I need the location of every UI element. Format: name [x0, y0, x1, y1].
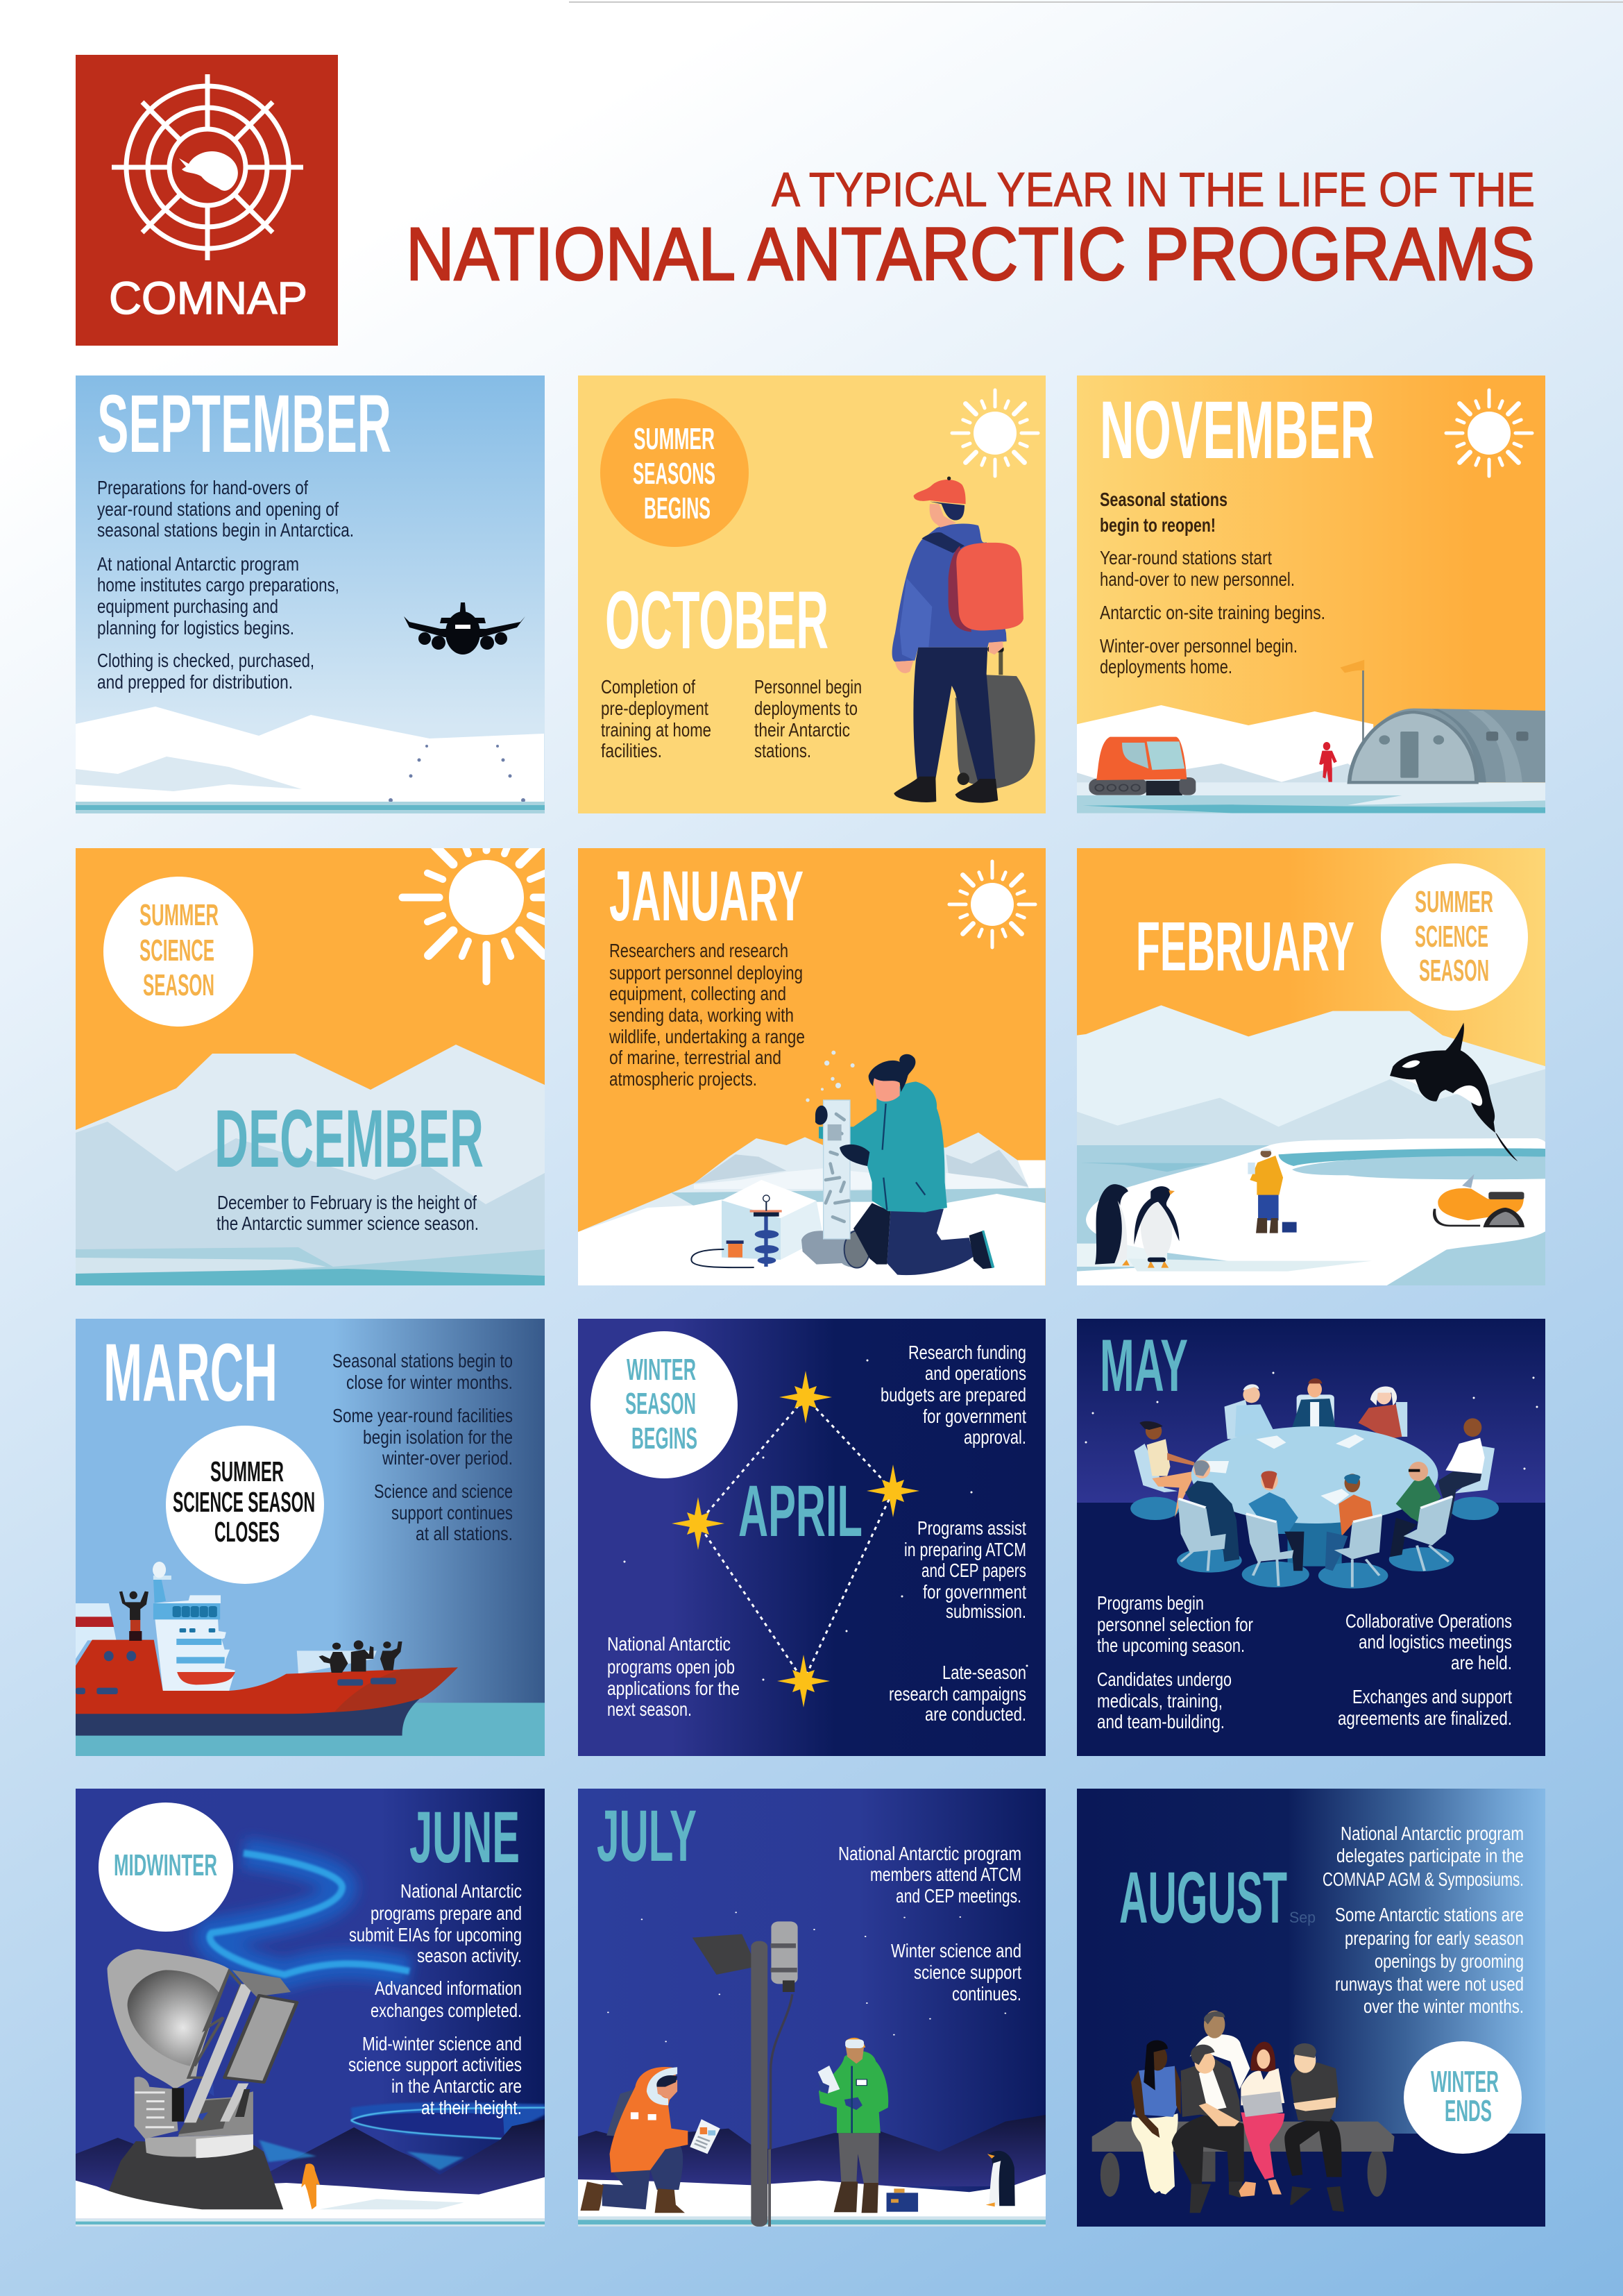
icon: instrument mast: [692, 1921, 798, 2227]
seated man with jacket: [1172, 2045, 1244, 2213]
text: April notes left: National Antarctic: [607, 1633, 731, 1655]
panel: November: [1077, 375, 1549, 822]
text: October notes right: their Antarctic: [754, 719, 850, 741]
text: November notes: [1100, 489, 1325, 677]
text: November notes: Year-round stations start: [1100, 547, 1272, 568]
text: April notes right: approval.: [964, 1426, 1026, 1448]
text: March notes: [332, 1350, 513, 1544]
text: April notes right: Programs assist: [917, 1517, 1026, 1539]
text: June notes: science support activities: [348, 2054, 522, 2075]
text: January notes: atmospheric projects.: [609, 1068, 757, 1090]
icon: sun: [1446, 390, 1532, 476]
text: June notes: Advanced information: [375, 1977, 522, 1999]
text: July notes: [838, 1843, 1021, 2004]
badge: summer science season: SUMMER: [1415, 885, 1493, 919]
badge: summer science season closes: SCIENCE SEASON: [173, 1486, 315, 1518]
icon: sun: [949, 861, 1035, 947]
text: April notes right: for government: [923, 1406, 1026, 1427]
standing man: [1190, 2011, 1250, 2089]
text: April notes right: budgets are prepared: [881, 1384, 1026, 1406]
text: November notes: Antarctic on-site training begins.: [1100, 602, 1325, 623]
text: June notes: exchanges completed.: [371, 2000, 522, 2021]
person kneeling: [819, 1054, 994, 1275]
text: May notes left: and team-building.: [1097, 1711, 1225, 1732]
badge: winter season begins: WINTER: [627, 1353, 696, 1387]
panel: July: [578, 1789, 1048, 2227]
ice floe: [1086, 1138, 1547, 1265]
text: January notes: sending data, working with: [609, 1004, 794, 1026]
badge: midwinter: [99, 1803, 233, 1932]
text: September notes: equipment purchasing and: [97, 596, 278, 617]
icon: arched hut: [1349, 709, 1549, 782]
icon: bench: [1092, 2122, 1395, 2197]
heading: October: OCTOBER: [605, 575, 829, 666]
text: September notes: At national Antarctic program: [97, 553, 299, 575]
people and chairs in front: [1177, 1460, 1454, 1589]
icon: sun: [952, 390, 1038, 476]
text: April notes right: for government: [923, 1581, 1026, 1603]
constellation diamond lines: [698, 1397, 893, 1681]
icon: orange tracked vehicle: [1089, 737, 1196, 795]
icon: ice core tube: [824, 1100, 850, 1239]
person kneeling in orange parka: [580, 2067, 720, 2213]
text: April notes right: Late-season: [942, 1662, 1026, 1683]
illustration: ice floe, penguins, orca, snowmobile: [1077, 1005, 1547, 1289]
heading: September: SEPTEMBER: [97, 378, 391, 470]
text: October notes left: training at home: [601, 719, 711, 741]
text: April notes right: Research funding: [908, 1342, 1026, 1363]
text: April notes left: [607, 1633, 740, 1720]
heading: November: NOVEMBER: [1100, 385, 1375, 476]
text: June notes: [348, 1880, 522, 2118]
icon: person in orange: [301, 2163, 320, 2209]
title: [406, 162, 1535, 296]
heading: January: JANUARY: [609, 856, 804, 936]
text: October notes right: [754, 676, 862, 761]
text: April notes right: are conducted.: [925, 1703, 1026, 1725]
text: May notes left: the upcoming season.: [1097, 1635, 1245, 1656]
illustration: traveller with backpack and suitcase: [892, 476, 1035, 803]
icon: crew silhouettes: [119, 1592, 402, 1673]
text: December notes: the Antarctic summer science season.: [216, 1213, 479, 1234]
text: January notes: wildlife, undertaking a range: [609, 1026, 805, 1047]
text: March notes: close for winter months.: [346, 1371, 513, 1393]
badge: summer science season: SEASON: [143, 968, 214, 1002]
text: September notes: year-round stations and opening of: [97, 498, 339, 520]
text: June notes: in the Antarctic are: [391, 2075, 522, 2097]
text: April notes right: and CEP papers: [921, 1560, 1026, 1581]
text: November notes: hand-over to new personnel.: [1100, 568, 1295, 590]
icon: gloves: [815, 1106, 869, 1166]
badge: summer science season: SCIENCE: [139, 934, 214, 968]
text: November notes: begin to reopen!: [1100, 514, 1216, 536]
heading: February: FEBRUARY: [1136, 908, 1354, 986]
text: May notes left: personnel selection for: [1097, 1614, 1253, 1635]
text: March notes: support continues: [391, 1502, 513, 1523]
text: May notes left: medicals, training,: [1097, 1690, 1223, 1712]
icon: constellation stars: [672, 1371, 919, 1707]
badge: summer science season closes: SUMMER: [210, 1455, 284, 1487]
text: June notes: Mid-winter science and: [362, 2033, 522, 2054]
logo wordmark: COMNAP: [109, 272, 307, 323]
text: December notes: [216, 1192, 479, 1234]
icon: ice auger and motor: [691, 1195, 782, 1267]
text: August notes: preparing for early season: [1345, 1927, 1524, 1949]
text: January notes: support personnel deploying: [609, 962, 803, 984]
text: October notes right: Personnel begin: [754, 676, 862, 698]
text: October notes left: Completion of: [601, 676, 695, 698]
panel: March: [76, 1319, 545, 1756]
text: June notes: at their height.: [421, 2097, 522, 2118]
badge: summer seasons begins: SEASONS: [633, 457, 715, 491]
text: September notes: Clothing is checked, purchased,: [97, 650, 314, 671]
panel: February: [1077, 848, 1547, 1289]
badge: summer science season: [1381, 863, 1528, 1011]
text: July notes: National Antarctic program: [838, 1843, 1021, 1864]
icon: equipment box: [887, 2188, 918, 2212]
text: August notes: [1323, 1823, 1524, 2017]
icon: aeroplane: [404, 602, 525, 655]
badge: summer science season: SEASON: [1419, 954, 1489, 988]
text: April notes right: [881, 1342, 1026, 1725]
text: August notes: Some Antarctic stations are: [1335, 1904, 1524, 1925]
text: March notes: Science and science: [374, 1480, 513, 1502]
heading: June: JUNE: [409, 1797, 520, 1878]
text: January notes: of marine, terrestrial and: [609, 1047, 781, 1068]
text: December notes: December to February is the height of: [217, 1192, 477, 1213]
heading: March: MARCH: [103, 1327, 278, 1419]
seated woman in blue: [1131, 2041, 1181, 2195]
text: March notes: Seasonal stations begin to: [332, 1350, 513, 1371]
icon: rock core: [801, 1230, 869, 1268]
text: August notes: delegates participate in the: [1336, 1845, 1524, 1866]
badge: summer seasons begins: [600, 398, 749, 547]
aurora: [210, 1853, 409, 1975]
heading: July: JULY: [597, 1796, 697, 1877]
badge: summer seasons begins: SUMMER: [634, 422, 715, 456]
mountains and water: [76, 1045, 545, 1285]
text: April notes right: in preparing ATCM: [904, 1539, 1026, 1560]
illustration: researcher with ice core: [578, 1051, 1046, 1285]
text: April notes left: next season.: [607, 1698, 692, 1720]
text: September notes: planning for logistics begins.: [97, 617, 294, 639]
text: June notes: programs prepare and: [371, 1902, 522, 1924]
text: July notes: and CEP meetings.: [896, 1885, 1021, 1907]
text: April notes right: and operations: [925, 1362, 1026, 1384]
faint stray label: Sep: [1289, 1909, 1316, 1926]
text: October notes left: facilities.: [601, 740, 662, 761]
icon: flag: [1340, 660, 1364, 782]
panel: January: [578, 848, 1046, 1285]
panel: April: [578, 1319, 1046, 1756]
snowy mountains and runway: [76, 707, 545, 813]
illustration: station scene with vehicle, person and hut: [1077, 660, 1549, 822]
text: April notes right: submission.: [946, 1601, 1026, 1622]
panel: September: [76, 375, 545, 813]
text: July notes: members attend ATCM: [870, 1864, 1021, 1885]
text: October notes left: pre-deployment: [601, 698, 708, 719]
seated woman with laptop: [1239, 2042, 1284, 2197]
seated man in black: [1284, 2043, 1344, 2212]
table: [1191, 1426, 1438, 1567]
icon: polar web with Antarctica: [112, 74, 303, 260]
text: April notes left: applications for the: [607, 1678, 740, 1699]
text: March notes: at all stations.: [416, 1523, 513, 1544]
badge: winter ends: ENDS: [1445, 2094, 1492, 2128]
text: July notes: Winter science and: [891, 1940, 1021, 1961]
text: August notes: openings by grooming: [1375, 1950, 1524, 1972]
panel: June: [76, 1789, 545, 2227]
text: September notes: seasonal stations begin in Antarctica.: [97, 519, 354, 541]
text: June notes: National Antarctic: [400, 1880, 522, 1902]
text: April notes left: programs open job: [607, 1656, 735, 1678]
badge: winter season begins: [590, 1331, 738, 1478]
badge: summer seasons begins: BEGINS: [644, 491, 711, 525]
text: May notes right: Collaborative Operations: [1345, 1610, 1512, 1632]
icon: telescope: [108, 1949, 297, 2209]
badge: summer science season: [103, 877, 253, 1027]
badge: midwinter: MIDWINTER: [114, 1848, 217, 1882]
panel: December: [76, 813, 570, 1285]
text: May notes left: [1097, 1592, 1253, 1732]
badge: summer science season: SUMMER: [139, 898, 219, 932]
heading: May: MAY: [1100, 1324, 1188, 1407]
text: May notes right: agreements are finalized.: [1338, 1707, 1512, 1729]
text: May notes left: Candidates undergo: [1097, 1669, 1232, 1690]
text: May notes left: Programs begin: [1097, 1592, 1204, 1614]
badge: winter ends: [1404, 2041, 1522, 2154]
heading: December: DECEMBER: [214, 1093, 484, 1185]
text: May notes right: and logistics meetings: [1359, 1631, 1512, 1653]
text: October notes right: stations.: [754, 740, 811, 761]
text: January notes: equipment, collecting and: [609, 983, 786, 1004]
text: March notes: Some year-round facilities: [332, 1405, 513, 1426]
text: July notes: science support: [914, 1961, 1021, 1983]
heading: August: AUGUST: [1119, 1857, 1287, 1939]
icon: large sun: [402, 813, 570, 981]
badge: winter season begins: SEASON: [625, 1387, 696, 1421]
icon: penguin: [986, 2151, 1015, 2206]
text: November notes: deployments home.: [1100, 656, 1232, 677]
badge: summer science season closes: CLOSES: [214, 1516, 280, 1548]
illustration: icebreaker ship: [76, 1562, 545, 1756]
badge: summer science season closes: [166, 1426, 324, 1584]
text: August notes: National Antarctic program: [1341, 1823, 1524, 1844]
icon: person in yellow parka: [1248, 1149, 1297, 1233]
text: September notes: Preparations for hand-overs of: [97, 477, 308, 498]
text: January notes: Researchers and research: [609, 940, 788, 961]
text: November notes: Seasonal stations: [1100, 489, 1227, 510]
text: September notes: home institutes cargo preparations,: [97, 574, 339, 596]
icon: snowmobile: [1433, 1174, 1524, 1227]
text: June notes: submit EIAs for upcoming: [349, 1924, 522, 1945]
text: October notes left: [601, 676, 711, 761]
text: September notes: [97, 477, 354, 693]
badge: winter ends: WINTER: [1431, 2065, 1499, 2099]
text: April notes right: research campaigns: [889, 1683, 1026, 1705]
text: June notes: season activity.: [417, 1945, 522, 1966]
badge: winter season begins: BEGINS: [631, 1421, 697, 1455]
text: August notes: runways that were not used: [1335, 1973, 1524, 1995]
icon: person in red: [1319, 742, 1337, 782]
text: October notes right: deployments to: [754, 698, 858, 719]
title: A TYPICAL YEAR IN THE LIFE OF THE: [772, 162, 1535, 217]
badge: summer science season: SCIENCE: [1415, 920, 1488, 954]
illustration: winter field scene with mast: [578, 1911, 1048, 2227]
panel: May: [1077, 1319, 1545, 1756]
illustration: telescope on snow: [76, 1949, 545, 2227]
text: March notes: winter-over period.: [382, 1447, 513, 1469]
text: August notes: over the winter months.: [1363, 1995, 1524, 2017]
text: March notes: begin isolation for the: [363, 1426, 513, 1448]
text: May notes right: are held.: [1451, 1652, 1512, 1673]
person standing in green parka: [818, 2038, 888, 2213]
panel: October: [578, 375, 1046, 813]
text: August notes: COMNAP AGM & Symposiums.: [1323, 1868, 1524, 1890]
icon: penguins: [1095, 1184, 1179, 1268]
illustration: meeting around round table: [1130, 1378, 1499, 1589]
text: September notes: and prepped for distribution.: [97, 671, 293, 693]
seated people at the back: [1134, 1378, 1495, 1520]
heading: April: APRIL: [738, 1471, 863, 1552]
text: July notes: continues.: [952, 1983, 1021, 2004]
text: May notes right: Exchanges and support: [1352, 1686, 1512, 1707]
text: January notes: [609, 940, 805, 1090]
icon: orca: [1390, 1022, 1518, 1161]
text: November notes: Winter-over personnel begin.: [1100, 635, 1298, 657]
illustration: people on a bench: [1092, 2011, 1395, 2213]
text: May notes right: [1338, 1610, 1512, 1729]
logo: COMNAP: [76, 55, 338, 346]
panel: August: [1077, 1789, 1545, 2227]
